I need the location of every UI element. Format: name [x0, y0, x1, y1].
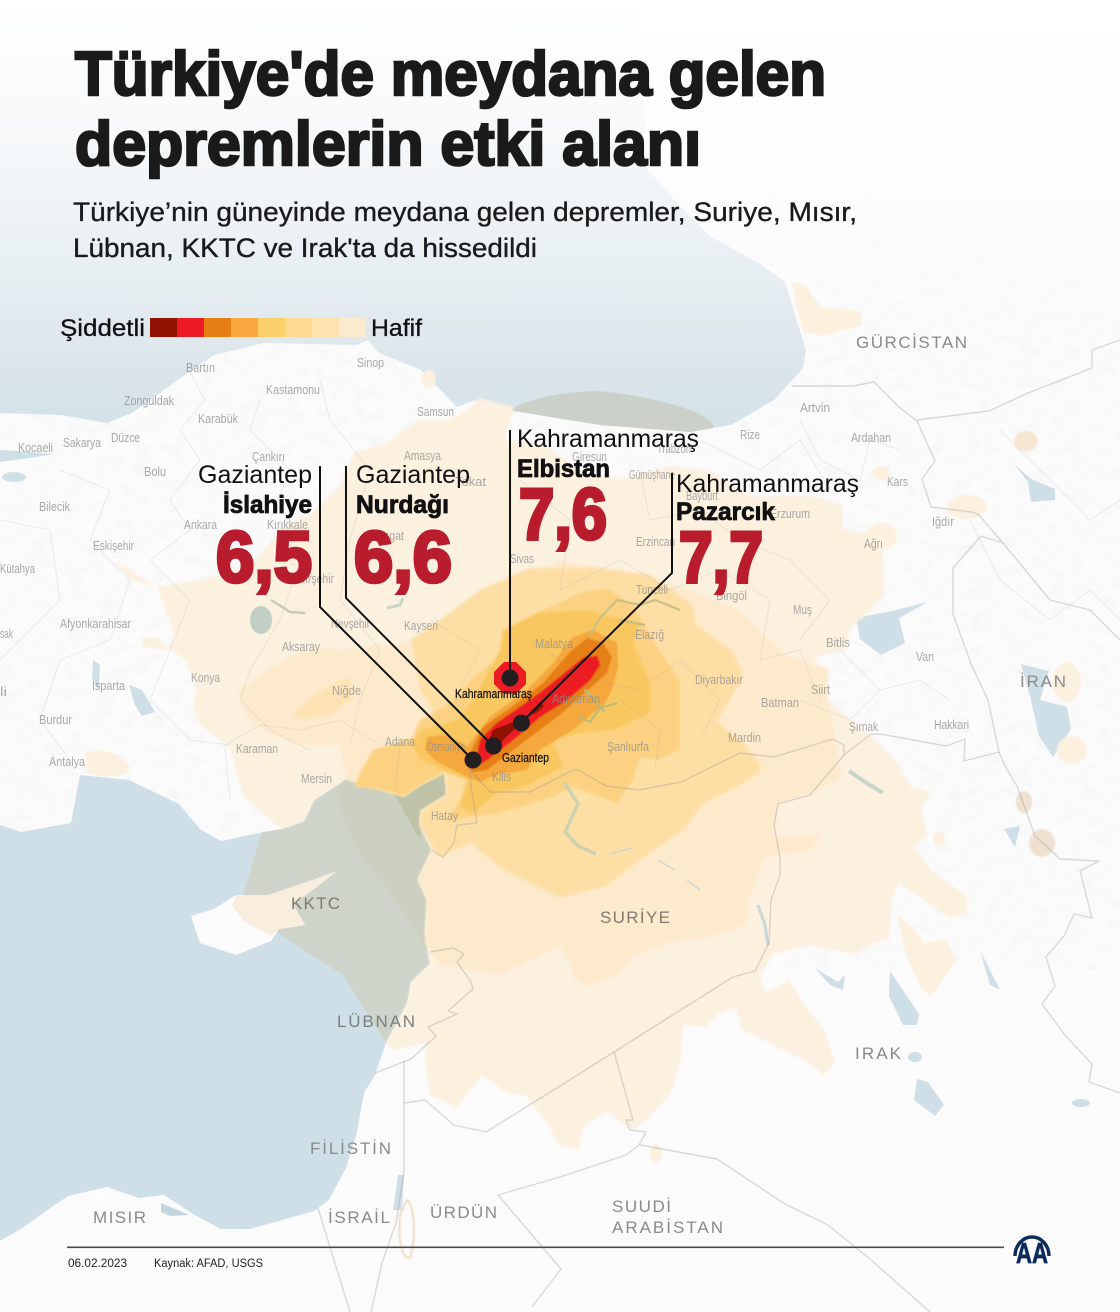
- city labels: Bolu: [144, 465, 166, 479]
- city labels: Ağrı: [864, 537, 883, 551]
- city labels: Kırıkkale: [267, 518, 308, 532]
- country labels: [93, 333, 1066, 1237]
- legend: intensity scale: Şiddetli: [60, 315, 145, 342]
- icon: AA logo: AA: [1016, 1238, 1048, 1270]
- shake zone over the Mediterranean: [243, 770, 450, 1043]
- city labels: Kilis: [492, 770, 511, 784]
- city labels: Kars: [887, 475, 908, 489]
- city labels: Artvin: [800, 401, 830, 415]
- city labels: Elazığ: [635, 628, 664, 642]
- city labels: Batman: [761, 696, 799, 710]
- city labels: Mersin: [301, 772, 332, 786]
- city labels: Hatay: [431, 809, 459, 823]
- city labels: Şırnak: [849, 720, 879, 734]
- country labels: SURİYE: [600, 908, 670, 927]
- callout: Nurdagi 6,6: Gaziantep: [356, 461, 470, 489]
- title: [75, 40, 826, 179]
- country labels: KKTC: [291, 894, 340, 913]
- callout: Pazarcik 7,7: Kahramanmaraş: [676, 470, 859, 498]
- country labels: IRAK: [855, 1044, 902, 1063]
- epicentre city labels: [455, 687, 549, 765]
- city labels: Siirt: [811, 683, 830, 697]
- intensity zone: pale yellow: [354, 568, 760, 898]
- city labels: Gümüşhane: [629, 468, 675, 482]
- legend: intensity scale: Hafif: [371, 315, 422, 342]
- callout: Elbistan 7,6: Elbistan: [517, 455, 610, 483]
- shake zone over the Black Sea: [512, 391, 714, 432]
- city labels: Kocaeli: [18, 441, 53, 455]
- country labels: FİLİSTİN: [310, 1139, 391, 1158]
- city labels: Zonguldak: [124, 394, 175, 408]
- callout: Nurdagi 6,6: 6,6: [354, 518, 452, 598]
- intensity zone: pale patch near Nigde: [293, 678, 352, 720]
- Black Sea: [0, 0, 806, 432]
- subtitle: [73, 197, 857, 263]
- callout: Pazarcik 7,7: 7,7: [679, 518, 763, 598]
- city labels: Adıyaman: [552, 692, 600, 706]
- callout: Islahiye 6,5: 6,5: [216, 518, 312, 598]
- Mediterranean Sea: [0, 772, 447, 1241]
- callout: Pazarcik 7,7: [676, 470, 859, 598]
- city labels: Ankara: [184, 518, 217, 532]
- city labels: Isparta: [92, 679, 125, 693]
- intensity zone: darkest: [487, 702, 544, 750]
- city labels: Bartın: [186, 361, 215, 375]
- city labels: Diyarbakır: [695, 673, 743, 687]
- country labels: LÜBNAN: [337, 1012, 415, 1031]
- footer: date and source: Kaynak: AFAD, USGS: [154, 1258, 263, 1270]
- city labels: Kastamonu: [266, 383, 320, 397]
- intensity zone: light: [239, 561, 842, 986]
- city labels: Samsun: [417, 405, 454, 419]
- city labels: [0, 356, 969, 823]
- country borders: [318, 340, 1120, 1312]
- city labels: Çankırı: [252, 450, 285, 464]
- city labels: Amasya: [404, 449, 441, 463]
- city labels: sak: [0, 627, 14, 641]
- epicentre city labels: Kahramanmaraş: [455, 687, 532, 701]
- city labels: Van: [916, 650, 934, 664]
- city labels: Sakarya: [63, 436, 101, 450]
- callout: Pazarcik 7,7: Pazarcık: [676, 498, 775, 526]
- intensity zone: yellow: [355, 588, 680, 823]
- intensity zone: red: [473, 656, 600, 768]
- intensity zone: lightest: [114, 398, 967, 1150]
- city labels: Rize: [740, 428, 760, 442]
- intensity zone: saturated yellow: [412, 610, 650, 813]
- country labels: İSRAİL: [328, 1208, 390, 1227]
- city labels: Iğdır: [932, 515, 954, 529]
- city labels: Yozgat: [372, 529, 404, 543]
- epicentre city labels: Gaziantep: [502, 751, 549, 765]
- leader lines: [320, 430, 672, 760]
- city labels: Düzce: [111, 431, 140, 445]
- city labels: Erzurum: [770, 507, 810, 521]
- country labels: ARABİSTAN: [612, 1218, 723, 1237]
- small water bodies: [0, 450, 1090, 1216]
- city labels: Bilecik: [39, 500, 71, 514]
- city labels: Erzincan: [636, 535, 675, 549]
- footer: date and source: [68, 1258, 263, 1270]
- city labels: Sivas: [510, 552, 534, 566]
- Cyprus: [191, 871, 337, 955]
- intensity zone: small outlying patches: [85, 282, 1087, 1258]
- country labels: SUUDİ: [612, 1197, 671, 1216]
- intensity zone: orange: [465, 638, 612, 772]
- city labels: Antalya: [49, 755, 85, 769]
- city labels: Afyonkarahisar: [60, 617, 131, 631]
- city labels: Mardin: [728, 731, 761, 745]
- callout: Islahiye 6,5: [198, 461, 312, 598]
- callout: Islahiye 6,5: İslahiye: [223, 491, 312, 519]
- city labels: Karaman: [236, 742, 278, 756]
- city labels: Kırşehir: [298, 572, 334, 586]
- footer: date and source: 06.02.2023: [68, 1258, 127, 1270]
- city labels: Kayseri: [404, 619, 438, 633]
- city labels: Giresun: [572, 450, 607, 464]
- city labels: Hakkari: [934, 718, 969, 732]
- subtitle: Türkiye’nin güneyinde meydana gelen depremler, Suriye, Mısır,: [73, 197, 857, 227]
- city labels: Malatya: [535, 637, 573, 651]
- subtitle: Lübnan, KKTC ve Irak'ta da hissedildi: [73, 233, 537, 263]
- city labels: Konya: [191, 671, 220, 685]
- title: Türkiye'de meydana gelen: [75, 40, 826, 109]
- country labels: MISIR: [93, 1208, 146, 1227]
- city labels: Niğde: [332, 684, 361, 698]
- country labels: ÜRDÜN: [430, 1203, 497, 1222]
- Elbistan red zone: [494, 662, 526, 694]
- country labels: İRAN: [1020, 672, 1066, 691]
- intensity zone: orange-yellow: [425, 630, 618, 782]
- city labels: Trabzon: [657, 442, 691, 456]
- city labels: Aksaray: [282, 640, 321, 654]
- callout: Elbistan 7,6: [517, 425, 699, 555]
- city labels: Burdur: [39, 713, 72, 727]
- callout: Islahiye 6,5: Gaziantep: [198, 461, 312, 489]
- rivers and reservoirs: [271, 598, 883, 945]
- province borders: [0, 372, 1120, 800]
- Salt Lake: [250, 606, 272, 634]
- title: depremlerin etki alanı: [75, 110, 701, 179]
- city labels: Bitlis: [826, 636, 850, 650]
- epicentre dots: [464, 670, 530, 768]
- city labels: Adana: [385, 735, 415, 749]
- callout: Nurdagi 6,6: Nurdağı: [356, 491, 449, 519]
- city labels: Bayburt: [686, 489, 718, 503]
- city labels: Sinop: [357, 356, 384, 370]
- city labels: Eskişehir: [93, 539, 134, 553]
- footer rule: [67, 1246, 1004, 1248]
- legend: intensity scale: [60, 315, 422, 342]
- city labels: Karabük: [198, 412, 239, 426]
- city labels: Muş: [793, 603, 812, 617]
- city labels: Nevşehir: [331, 617, 370, 631]
- city labels: Tunceli: [636, 583, 668, 597]
- city labels: Tokat: [455, 475, 487, 489]
- city labels: Ardahan: [851, 431, 891, 445]
- city labels: Osmaniye: [427, 740, 465, 754]
- city labels: Bingöl: [716, 589, 747, 603]
- callout: Elbistan 7,6: Kahramanmaraş: [517, 425, 699, 453]
- land relief texture: [0, 170, 1120, 970]
- city labels: li: [0, 685, 7, 699]
- callout: Nurdagi 6,6: [354, 461, 470, 598]
- city labels: Şanlıurfa: [607, 740, 649, 754]
- city labels: Kütahya: [0, 562, 35, 576]
- country labels: GÜRCİSTAN: [856, 333, 967, 352]
- callout: Elbistan 7,6: 7,6: [519, 475, 607, 555]
